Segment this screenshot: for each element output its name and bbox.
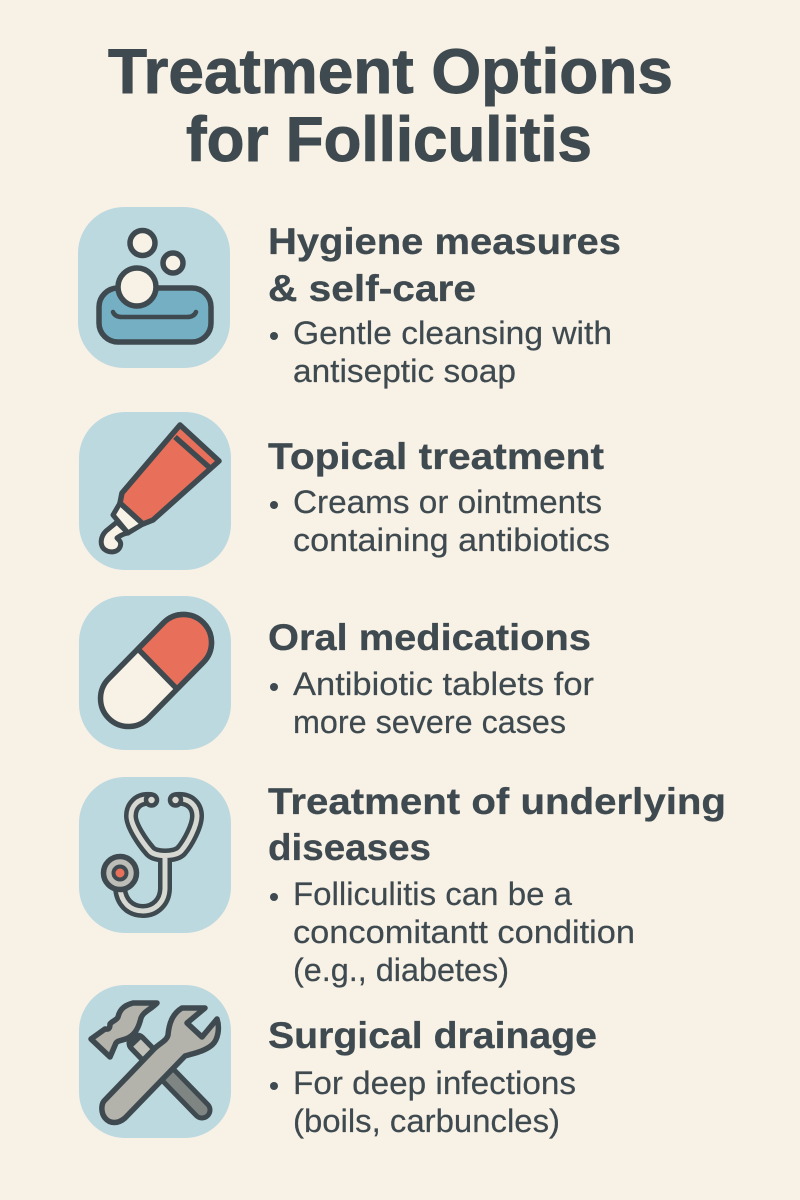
bullet text: hygiene	[270, 315, 612, 389]
bullet text: oral: Antibiotic tablets for	[293, 666, 594, 702]
icon: hammer and wrench	[79, 985, 231, 1138]
bullet text: underlying: (e.g., diabetes)	[293, 952, 509, 988]
title: Treatment Options	[108, 37, 673, 107]
panel: topical treatment	[79, 412, 610, 570]
bullet text: topical: Creams or ointments	[293, 484, 602, 520]
bullet text: topical	[270, 484, 610, 558]
bullet text: hygiene: Gentle cleansing with	[293, 315, 612, 351]
bullet text: hygiene: antiseptic soap	[293, 353, 516, 389]
heading: oral: Oral medications	[268, 617, 591, 658]
title	[108, 37, 673, 175]
panel: underlying diseases	[79, 777, 726, 988]
bullet text: surgical: (boils, carbuncles)	[293, 1103, 560, 1139]
bullet text: oral: more severe cases	[293, 704, 566, 740]
bullet text: topical: containing antibiotics	[293, 522, 610, 558]
bullet text: surgical: For deep infections	[293, 1065, 576, 1101]
heading: underlying: Treatment of underlying	[268, 781, 726, 822]
heading: hygiene	[268, 221, 621, 309]
panel: surgical drainage	[79, 985, 597, 1139]
bullet text: underlying	[270, 876, 635, 988]
bullet text: oral	[270, 666, 594, 740]
bullet text: underlying: Folliculitis can be a	[293, 876, 572, 912]
heading: surgical: Surgical drainage	[268, 1015, 597, 1056]
icon: ointment tube	[79, 412, 231, 570]
panel: oral medications	[79, 596, 594, 750]
icon: soap with bubbles	[78, 207, 230, 368]
heading: underlying: diseases	[268, 827, 431, 868]
icon: capsule	[79, 596, 231, 750]
bullet text: underlying: concomitantt condition	[293, 914, 635, 950]
heading: hygiene: Hygiene measures	[268, 221, 621, 262]
heading: underlying	[268, 781, 726, 868]
icon: stethoscope	[79, 777, 231, 933]
panel: hygiene measures	[78, 207, 621, 389]
heading: hygiene: & self-care	[268, 268, 476, 309]
bullet text: surgical	[270, 1065, 576, 1139]
title: for Folliculitis	[186, 105, 592, 175]
heading: topical: Topical treatment	[268, 436, 604, 477]
